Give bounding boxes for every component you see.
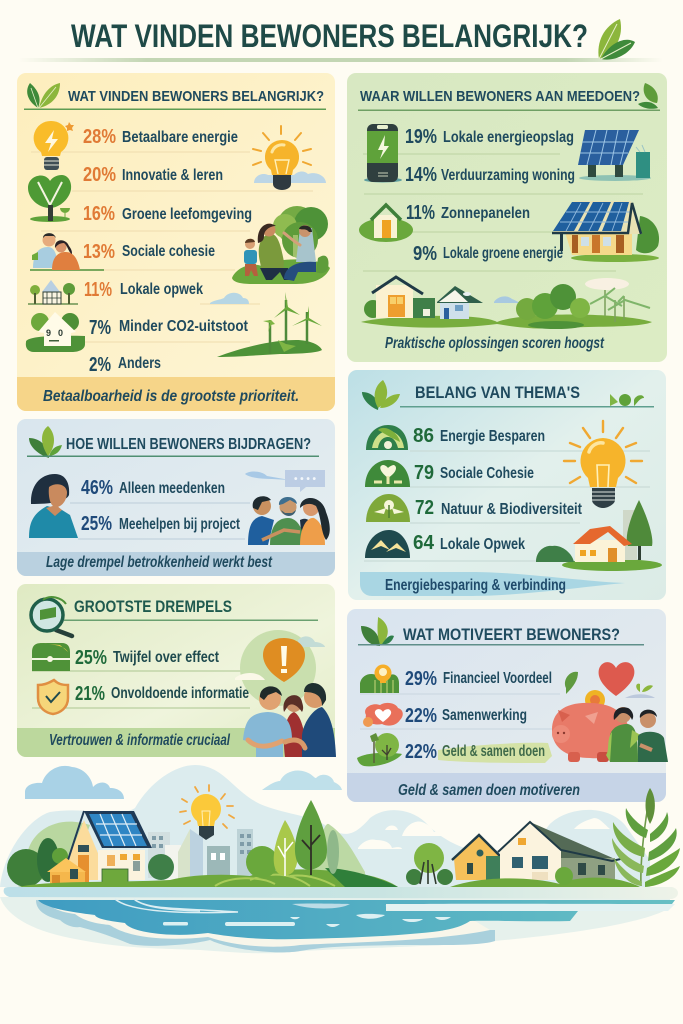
icon: couple [30,233,104,270]
stat: 2% anders: Anders [118,355,161,372]
panel: belang van thema's [348,370,666,600]
panel: waar willen bewoners aan meedoen [347,73,667,362]
stat: 25% meehelpen bij project: 25% [81,513,112,535]
stat: 79 sociale cohesie: 79 [414,462,434,484]
cream house [498,822,625,880]
stat: 22% geld en samen doen: 22% [405,741,437,763]
stat: 9% lokale groene energie: Lokale groene energie [443,245,563,262]
heading: WAT MOTIVEERT BEWONERS? [403,625,620,644]
stat: 46% alleen meedenken: 46% [81,477,113,499]
stat: 86 energie besparen: Energie Besparen [440,428,545,445]
footer text: Betaalboarheid is de grootste prioriteit. [43,388,299,405]
stat: 21% onvoldoende informatie [75,683,249,705]
water band [4,887,678,899]
stat: 11% zonnepanelen [406,202,530,224]
stat: 25% meehelpen bij project [81,513,240,535]
stat: 25% twijfel over effect [75,647,220,669]
person: child [244,250,257,264]
icon: solar panel [578,130,651,181]
icon: dome energie [366,425,408,450]
stat: 86 energie besparen [413,425,545,447]
stat: 28% betaalbare energie: Betaalbare energie [122,129,238,146]
icon: dome natuur [366,494,410,522]
heading: WAAR WILLEN BEWONERS AAN MEEDOEN? [360,88,640,105]
stat: 79 sociale cohesie [414,462,534,484]
white foam edge [45,900,490,947]
icon: small trees [357,733,402,766]
cloud right [262,770,342,790]
icon: heart tree [28,175,71,222]
highlight behind label [438,743,552,763]
panel footer band [17,552,335,576]
stat: 25% twijfel over effect: Twijfel over effect [113,649,220,666]
panel: grootste drempels [17,584,336,757]
footer text: Lage drempel betrokkenheid werkt best [46,554,273,571]
icon: landscape bulb [180,785,234,840]
panel: hoe willen bewoners bijdragen [17,419,335,576]
stat: 14% verduurzaming woning: 14% [405,164,437,186]
icon: small house with trees [28,280,78,304]
green container [102,869,128,886]
stat: 72 natuur en biodiversiteit [415,497,583,519]
pale water highlights [386,904,675,911]
stat: 28% betaalbare energie: 28% [83,126,116,148]
icon: heading leaves [638,83,658,109]
footer text: Praktische oplossingen scoren hoogst [385,335,604,352]
icon: heading leaves [361,617,394,646]
icon: small leaves and plant [610,394,644,406]
stat: 79 sociale cohesie: Sociale Cohesie [440,465,534,482]
blue-grey water edge [36,900,495,952]
clouds in hills [358,839,402,849]
icon: magnifying glass [31,597,72,636]
trees left [7,849,45,887]
icon: bulb with lightning [34,121,74,170]
panel footer band [17,728,335,757]
stat: 64 lokale opwek: 64 [413,532,435,554]
stat: 13% sociale cohesie: Sociale cohesie [122,243,215,260]
stat: 29% financieel voordeel: Financieel Voordeel [443,670,552,687]
hill light green [28,822,90,880]
illustration: family under tree [232,206,330,284]
icon: dome sociaal [365,460,410,487]
icon: title leaves [598,19,635,60]
stat: 21% onvoldoende informatie: 21% [75,683,105,705]
stat: 14% verduurzaming woning: Verduurzaming woning [441,167,575,184]
icon: glowing bulb [253,126,326,190]
stat: 19% lokale energieopslag: 19% [405,126,437,148]
stat: 9% lokale groene energie [413,243,563,265]
stat: 11% lokale opwek: Lokale opwek [120,281,203,298]
stat: 7% minder co2-uitstoot: Minder CO2-uitstoot [119,318,249,335]
icon: shield [38,680,68,714]
stat: 2% anders [89,354,161,376]
footer arrow with text [360,572,625,596]
stat: 13% sociale cohesie [83,241,215,263]
icon: battery [364,124,402,182]
stat: 11% lokale opwek: 11% [84,279,112,301]
stat: 13% sociale cohesie: 13% [83,241,115,263]
footer arrow with text: Energiebesparing & verbinding [385,577,566,594]
icon: speech bubble [245,470,325,492]
icon: bulb over crops [360,664,399,693]
trees centre [246,800,339,878]
small yellow house [47,858,86,885]
stat: 19% lokale energieopslag [405,126,574,148]
stat: 20% innovatie en leren: 20% [83,164,116,186]
outer pale shore [0,897,670,953]
icon: heading leaves [27,83,60,108]
stat: 9% lokale groene energie: 9% [413,243,437,265]
icon: house 90 with green hill [26,312,85,352]
icon: cloud [210,293,249,304]
house with solar roof [68,811,152,883]
icon: heading leaves [29,426,62,458]
person: man [296,228,316,262]
illustration: house with solar roof [552,201,659,262]
stat: 22% geld en samen doen [405,741,545,763]
icon: woman portrait [29,474,78,538]
stat: 72 natuur en biodiversiteit: 72 [415,497,434,519]
icon: heading leaves [362,380,400,410]
heading: BELANG VAN THEMA'S [415,383,580,402]
stat: 7% minder co2-uitstoot [89,317,249,339]
stat: 72 natuur en biodiversiteit: Natuur & Biodiversiteit [441,501,583,518]
stat: 29% financieel voordeel [405,668,552,690]
background hills [0,765,650,887]
icon: small house [359,205,413,242]
panel: wat vinden bewoners belangrijk [17,73,335,411]
icon: heart badge [363,703,403,727]
stat: 11% zonnepanelen: Zonnepanelen [441,205,530,222]
stat: 46% alleen meedenken: Alleen meedenken [119,480,225,497]
stat: 28% betaalbare energie [83,126,238,148]
footer text: Geld & samen doen motiveren [398,782,580,799]
illustration: three people talking [248,496,330,545]
illustration: red roof house with trees [536,500,662,571]
heading: WAT VINDEN BEWONERS BELANGRIJK? [68,88,324,105]
icon: house 90 with green hill: 9 0 [46,328,63,338]
stat: 22% samenwerking: 22% [405,705,437,727]
illustration: wind turbines on hill [217,292,322,357]
city buildings [148,829,253,883]
shrub [148,854,174,880]
yellow house [452,835,500,882]
person: woman [259,234,284,272]
icon: speech bubble: •••• [294,474,316,485]
icon: big bulb [564,421,642,508]
heading: GROOTSTE DREMPELS [74,597,232,616]
icon: dome bergen [365,530,410,558]
stat: 16% groene leefomgeving: Groene leefomgeving [122,206,252,223]
stat: 16% groene leefomgeving [83,203,252,225]
stat: 64 lokale opwek: Lokale Opwek [440,536,525,553]
stat: 22% geld en samen doen: Geld & samen doen [442,743,545,760]
small tree right [406,843,453,885]
illustration: bottom landscape [0,765,680,953]
cloud left [25,766,124,799]
stat: 64 lokale opwek [413,532,525,554]
stat: 46% alleen meedenken [81,477,225,499]
heading: HOE WILLEN BEWONERS BIJDRAGEN? [66,436,311,453]
ground right [450,878,640,887]
footer text: Vertrouwen & informatie cruciaal [49,732,230,749]
stat: 86 energie besparen: 86 [413,425,434,447]
illustration: piggy bank with people [552,662,668,762]
illustration: alert with three people [235,630,336,757]
illustration: houses and park [361,277,652,329]
stat: 14% verduurzaming woning [405,164,575,186]
stat: 25% twijfel over effect: 25% [75,647,107,669]
stat: 29% financieel voordeel: 29% [405,668,437,690]
stat: 7% minder co2-uitstoot: 7% [89,317,111,339]
stat: 21% onvoldoende informatie: Onvoldoende informatie [111,685,249,702]
icon: fern plant [612,788,680,887]
stat: 11% zonnepanelen: 11% [406,202,435,224]
stat: 22% samenwerking [405,705,527,727]
stat: 11% lokale opwek [84,279,203,301]
stat: 22% samenwerking: Samenwerking [442,707,527,724]
panel: wat motiveert bewoners [347,609,668,802]
stat: 20% innovatie en leren: Innovatie & leren [122,167,223,184]
stat: 20% innovatie en leren [83,164,223,186]
icon: green chest [32,643,70,671]
stat: 19% lokale energieopslag: Lokale energieopslag [443,129,574,146]
foreground ground [18,869,398,887]
panel footer band [17,377,335,411]
stat: 16% groene leefomgeving: 16% [83,203,115,225]
panel footer band [347,773,666,802]
stat: 2% anders: 2% [89,354,111,376]
stat: 25% meehelpen bij project: Meehelpen bij project [119,516,240,533]
main water [38,900,675,939]
